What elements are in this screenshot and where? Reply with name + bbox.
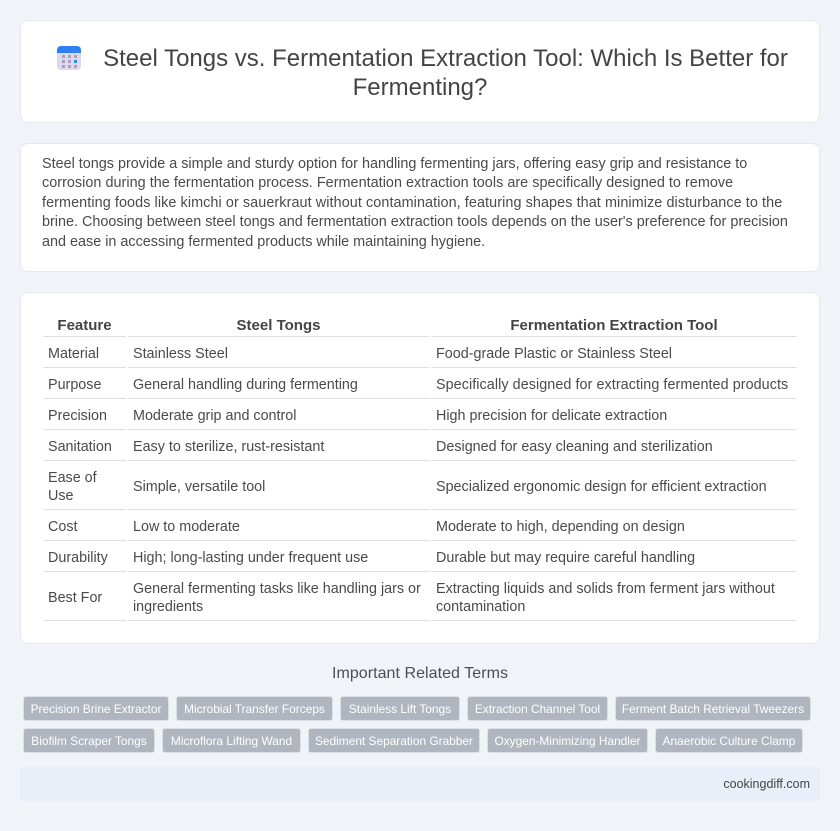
table row: cost: Moderate to high, depending on design [436,519,685,535]
footer bar [20,767,820,801]
table row: material: Food-grade Plastic or Stainless Steel [436,346,672,362]
table row: cost [48,519,685,535]
table row: purpose: Specifically designed for extracting fermented products [436,377,788,393]
text block: description: brine. Choosing between steel tongs and fermentation extraction tools depends on the user's preference for precision [42,214,788,230]
table row: precision [48,408,667,424]
table row: ease of use: Simple, versatile tool [133,479,265,495]
tags: related terms: Anaerobic Culture Clamp [663,734,795,748]
heading: important related terms: Important Related Terms [332,665,508,682]
icon: calendar [57,46,81,70]
table row: sanitation: Designed for easy cleaning and sterilization [436,439,713,455]
tags: related terms: Sediment Separation Grabber [315,734,473,748]
tags: related terms: Microflora Lifting Wand [171,734,292,748]
table row: material: Stainless Steel [133,346,228,362]
table row: best for: General fermenting tasks like handling jars or [133,581,421,597]
table row: precision: Moderate grip and control [133,408,296,424]
table row: sanitation: Easy to sterilize, rust-resistant [133,439,324,455]
text block: description: Steel tongs provide a simple and sturdy option for handling fermenting jars, offering easy grip and resistance to [42,156,747,172]
tags: related terms: Ferment Batch Retrieval Tweezers [622,702,804,716]
title line 2: Fermenting? [353,74,487,101]
tags: related terms: Microbial Transfer Forceps [184,702,325,716]
table row: cost: Cost [48,519,78,535]
tags: related terms: Biofilm Scraper Tongs [31,734,147,748]
table row: best for: contamination [436,599,525,615]
panel: description [20,143,820,272]
table row: sanitation [48,439,713,455]
table row: material [48,346,672,362]
table row: sanitation: Sanitation [48,439,112,455]
table: header row: Fermentation Extraction Tool [510,317,718,334]
table row: purpose: Purpose [48,377,101,393]
table row: best for: Best For [48,590,102,606]
table: header row: Steel Tongs [237,317,320,334]
text block: description: and ease in accessing fermented products while maintaining hygiene. [42,234,485,250]
tags: related terms: Extraction Channel Tool [475,702,600,716]
table row: durability [48,550,695,566]
tags: related terms [23,696,811,753]
table: header row: Feature [57,317,112,334]
footer source text: cookingdiff.com [723,777,810,791]
panel: title header [20,20,820,123]
table row: best for [48,581,775,615]
table row: precision: Precision [48,408,107,424]
table row: purpose [48,377,788,393]
table row: material: Material [48,346,99,362]
text block: description: corrosion during the fermentation process. Fermentation extraction tools are specifically designed to remove [42,175,733,191]
table row: durability: Durable but may require careful handling [436,550,695,566]
tags: related terms: Precision Brine Extractor [31,702,161,716]
table: header row [57,317,718,334]
panel: comparison table [20,292,820,644]
table row: durability: High; long-lasting under frequent use [133,550,368,566]
tags: related terms: Oxygen-Minimizing Handler [494,734,641,748]
text block: description: fermenting foods like kimchi or sauerkraut without contamination, featuring shapes that minimize disturbance to the [42,195,782,211]
table row: precision: High precision for delicate extraction [436,408,667,424]
table row: purpose: General handling during fermenting [133,377,358,393]
table row: ease of use: Ease of [48,470,97,486]
table row: ease of use: Use [48,488,74,504]
table row: best for: ingredients [133,599,203,615]
table row: cost: Low to moderate [133,519,240,535]
table row: best for: Extracting liquids and solids from ferment jars without [436,581,775,597]
text block: description [42,156,788,250]
title: Steel Tongs vs. Fermentation Extraction Tool: Which Is Better for [103,45,788,72]
table row: ease of use [48,470,767,504]
table row: durability: Durability [48,550,108,566]
tags: related terms: Stainless Lift Tongs [349,702,451,716]
table row: ease of use: Specialized ergonomic design for efficient extraction [436,479,767,495]
